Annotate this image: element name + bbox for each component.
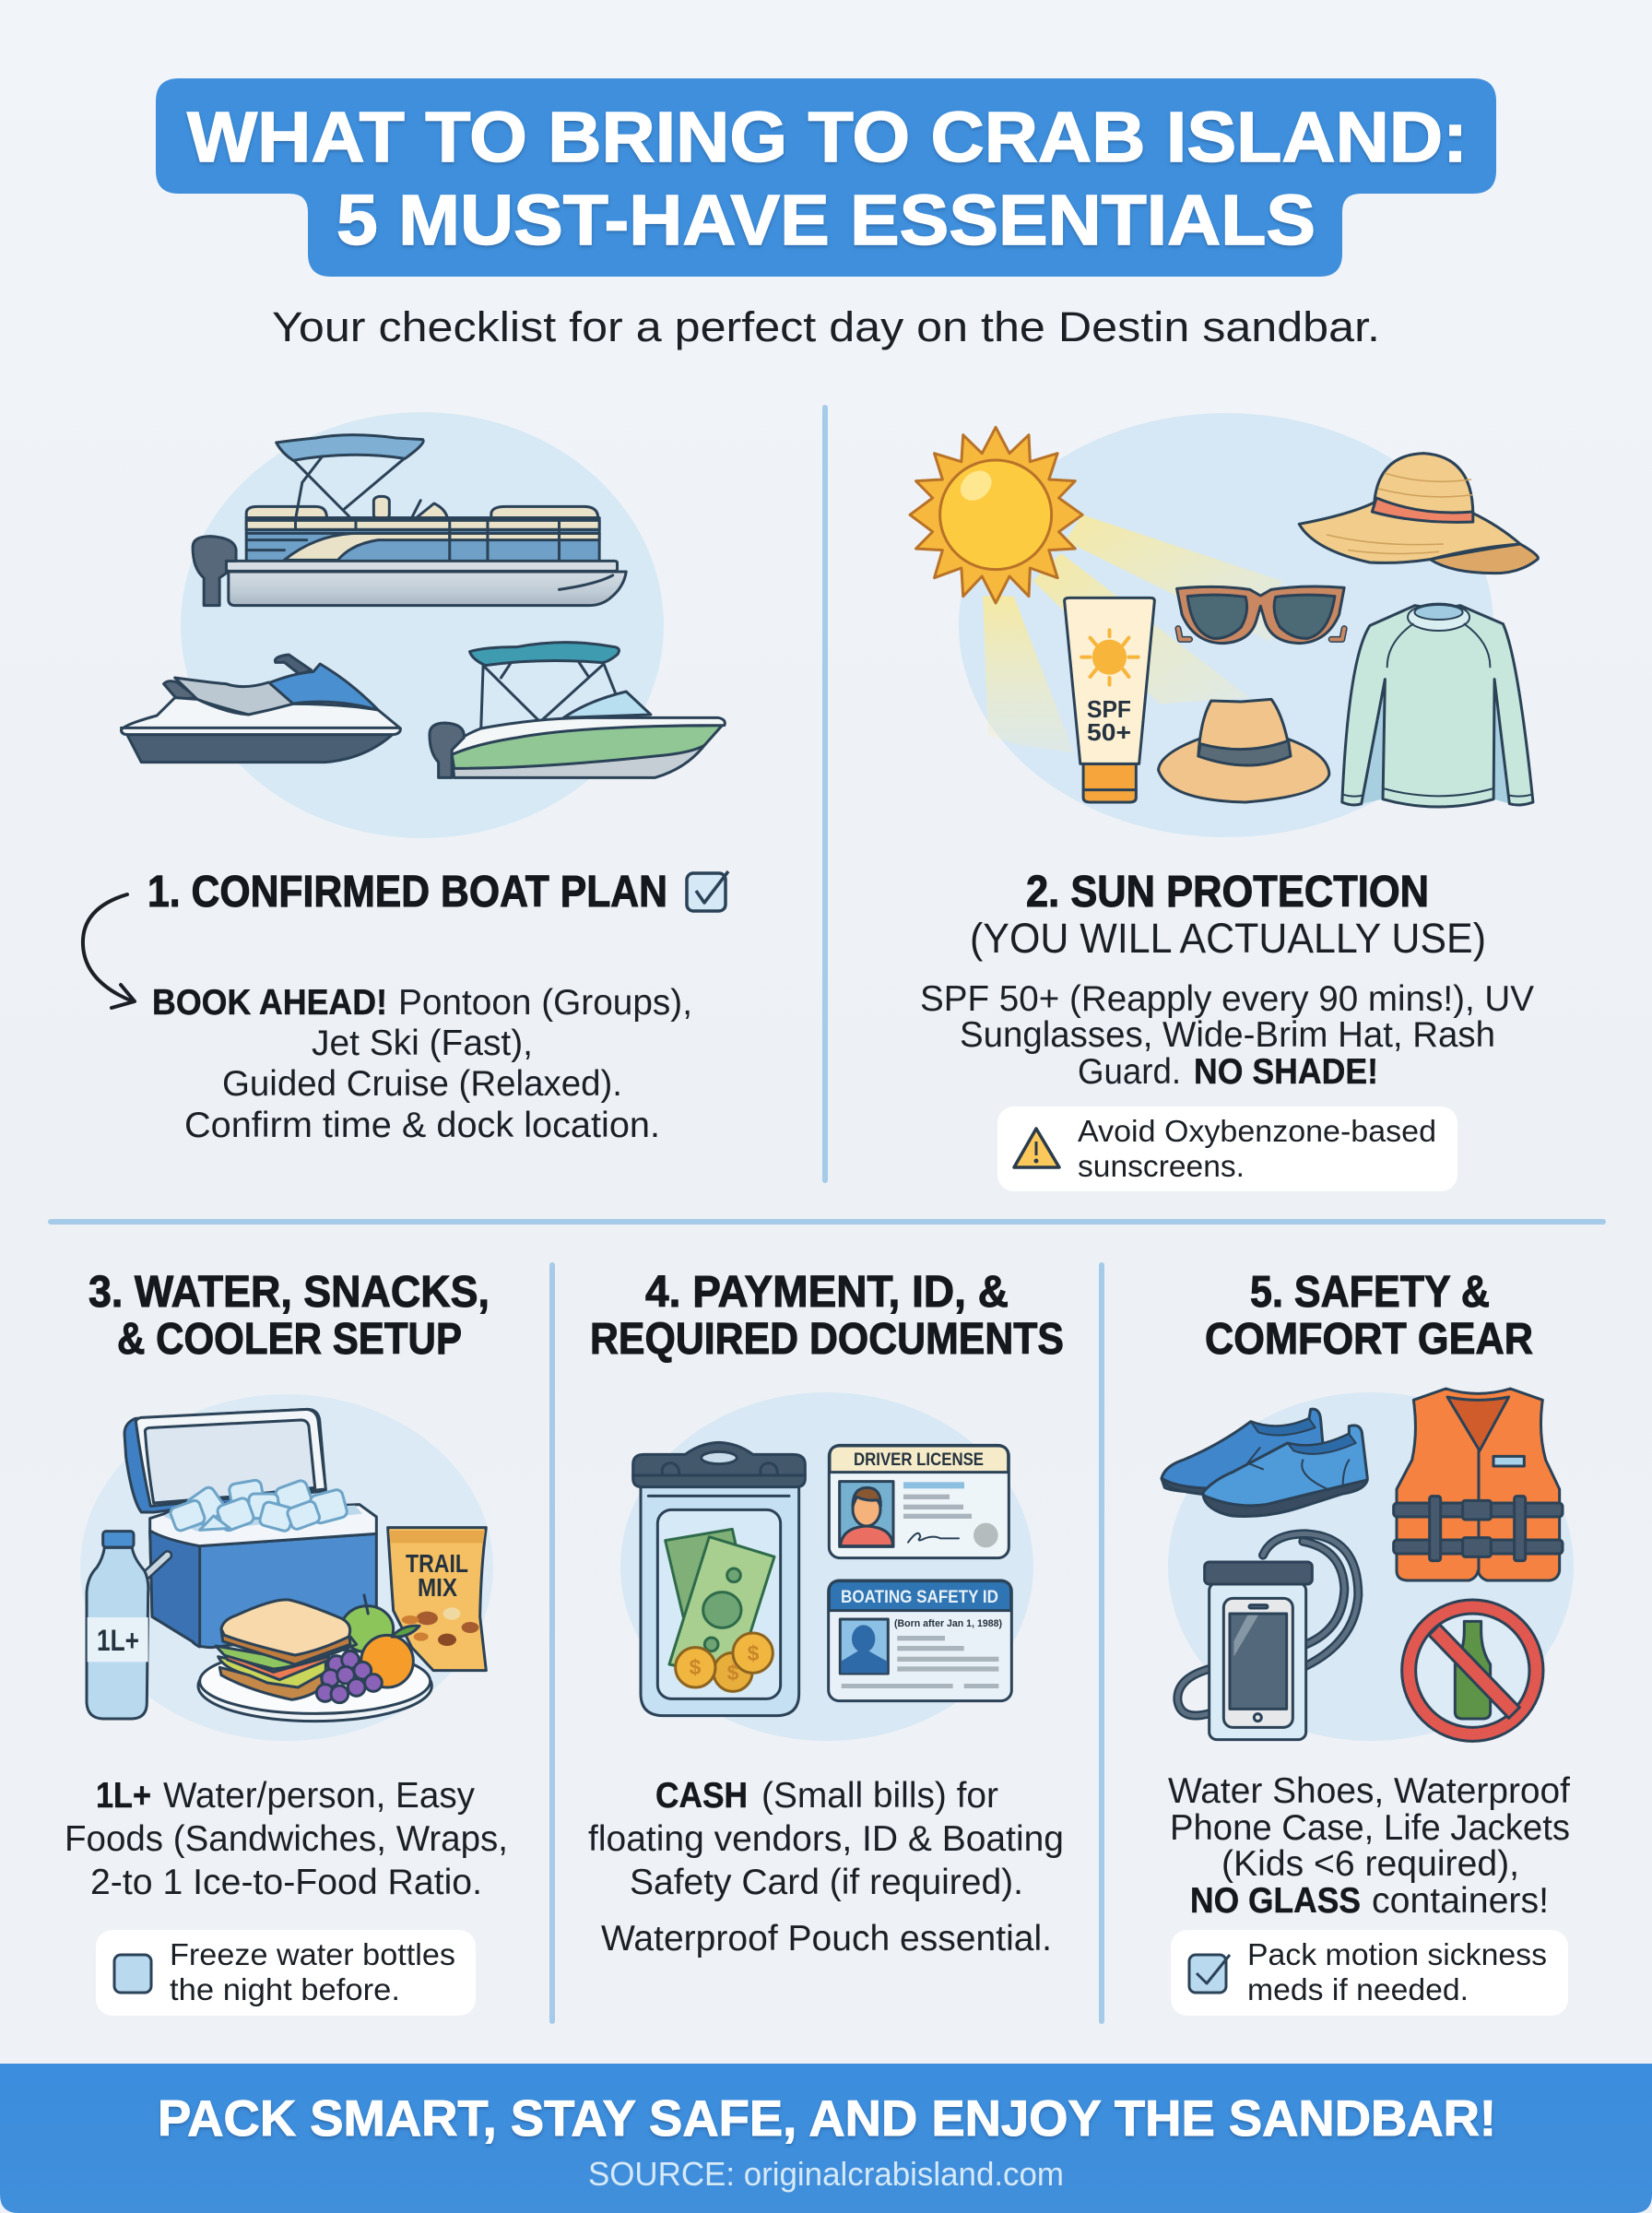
text: safety gear details: Water Shoes, Waterproof bbox=[1168, 1771, 1570, 1811]
heading: payment and documents bbox=[590, 1268, 1064, 1364]
text: payment details: floating vendors, ID & Boating bbox=[588, 1819, 1064, 1859]
pontoon boat bbox=[193, 435, 626, 606]
text: sun protection details: SPF 50+ (Reapply every 90 mins!), UV bbox=[920, 979, 1534, 1019]
title banner: WHAT TO BRING TO CRAB ISLAND: bbox=[187, 98, 1468, 177]
phone case bbox=[1177, 1533, 1358, 1740]
text: sun protection details bbox=[920, 979, 1534, 1092]
panel: sun protection bbox=[910, 413, 1538, 1191]
title banner bbox=[156, 78, 1496, 277]
driver license card bbox=[829, 1445, 1009, 1558]
heading: safety and comfort bbox=[1205, 1268, 1533, 1364]
icon: ticked checkbox bbox=[1189, 1955, 1230, 1993]
heading: payment and documents: 4. PAYMENT, ID, & bbox=[645, 1268, 1009, 1317]
text: safety gear details bbox=[1168, 1771, 1570, 1921]
sun bbox=[910, 427, 1082, 603]
heading: safety and comfort: COMFORT GEAR bbox=[1205, 1315, 1533, 1364]
callout: oxybenzone warning bbox=[997, 1106, 1457, 1191]
icon: boats illustration bbox=[122, 412, 725, 838]
sun hat bbox=[1159, 699, 1329, 802]
rash guard bbox=[1342, 604, 1533, 807]
text: boat plan details: BOOK AHEAD! bbox=[152, 983, 387, 1023]
footer banner bbox=[0, 2064, 1652, 2213]
title banner: 5 MUST-HAVE ESSENTIALS bbox=[336, 181, 1316, 260]
callout: freeze water tip: Freeze water bottles bbox=[170, 1938, 455, 1972]
text: water and food details: Water/person, Easy bbox=[163, 1776, 476, 1816]
icon: safety gear illustration bbox=[1162, 1389, 1574, 1741]
text: boat plan details: Confirm time & dock location. bbox=[184, 1106, 660, 1145]
callout: motion sickness tip: meds if needed. bbox=[1247, 1973, 1469, 2007]
sun rays bbox=[983, 515, 1282, 753]
bag label bbox=[406, 1549, 468, 1602]
waterproof pouch bbox=[633, 1442, 805, 1716]
icon: documents illustration bbox=[620, 1392, 1033, 1741]
bowrider boat bbox=[430, 643, 725, 777]
boating safety card bbox=[829, 1580, 1011, 1701]
bag label: TRAIL bbox=[406, 1549, 468, 1578]
coin symbols: $ bbox=[690, 1655, 702, 1679]
panel: water, snacks and cooler bbox=[65, 1268, 508, 2016]
bottle label: 1L+ bbox=[97, 1624, 139, 1657]
text: safety gear details: containers! bbox=[1372, 1881, 1549, 1921]
heading: sun protection: (YOU WILL ACTUALLY USE) bbox=[970, 915, 1486, 962]
callout: oxybenzone warning: sunscreens. bbox=[1078, 1150, 1245, 1184]
wide brim hat bbox=[1299, 454, 1538, 574]
ice cubes bbox=[169, 1479, 348, 1533]
panel: safety and comfort gear bbox=[1162, 1268, 1574, 2016]
text: sun protection details: Guard. bbox=[1078, 1052, 1181, 1092]
text: water and food details: 2-to 1 Ice-to-Food Ratio. bbox=[90, 1863, 482, 1902]
panel: payment, ID and documents bbox=[588, 1268, 1064, 1959]
card labels: DRIVER LICENSE bbox=[854, 1450, 984, 1470]
cooler bbox=[124, 1409, 376, 1648]
icon: heading checkbox bbox=[687, 871, 728, 911]
arrow: heading to body bbox=[83, 894, 135, 1008]
panel: confirmed boat plan bbox=[83, 412, 728, 1145]
text: payment details: (Small bills) for bbox=[761, 1776, 998, 1816]
heading: water snacks cooler bbox=[88, 1268, 490, 1364]
plate of food bbox=[198, 1595, 431, 1722]
callout: motion sickness tip: Pack motion sickness bbox=[1247, 1938, 1547, 1972]
coin symbols: $ bbox=[748, 1641, 760, 1665]
sunglasses bbox=[1177, 586, 1344, 644]
subtitle: Your checklist for a perfect day on the Destin sandbar. bbox=[272, 303, 1380, 350]
no glass sign bbox=[1402, 1600, 1543, 1741]
icon: sun protection illustration bbox=[910, 413, 1538, 837]
heading: sun protection: 2. SUN PROTECTION bbox=[1026, 868, 1429, 917]
text: safety gear details: (Kids <6 required), bbox=[1221, 1844, 1519, 1884]
footer banner: SOURCE: originalcrabisland.com bbox=[588, 2155, 1064, 2193]
text: sun protection details: NO SHADE! bbox=[1194, 1052, 1378, 1092]
callout: motion sickness tip bbox=[1171, 1930, 1568, 2016]
heading: confirmed boat plan: 1. CONFIRMED BOAT PLAN bbox=[148, 868, 667, 917]
footer banner: PACK SMART, STAY SAFE, AND ENJOY THE SANDBAR! bbox=[158, 2089, 1496, 2147]
heading: water snacks cooler: & COOLER SETUP bbox=[117, 1315, 462, 1364]
text: payment details: CASH bbox=[655, 1776, 748, 1816]
text: boat plan details bbox=[152, 983, 692, 1145]
text: water and food details: 1L+ bbox=[96, 1776, 151, 1816]
text: sun protection details: Sunglasses, Wide-Brim Hat, Rash bbox=[960, 1015, 1495, 1055]
icon: empty checkbox bbox=[114, 1955, 151, 1993]
text: water and food details bbox=[65, 1776, 508, 1902]
icon: cooler and food illustration bbox=[80, 1394, 493, 1741]
heading: payment and documents: REQUIRED DOCUMENTS bbox=[590, 1315, 1064, 1364]
card labels bbox=[841, 1450, 1002, 1629]
callout: freeze water tip bbox=[96, 1930, 476, 2016]
trail mix bag bbox=[388, 1528, 486, 1671]
text: boat plan details: Pontoon (Groups), bbox=[398, 983, 692, 1023]
heading: safety and comfort: 5. SAFETY & bbox=[1250, 1268, 1490, 1317]
text: water and food details: Foods (Sandwiches, Wraps, bbox=[65, 1819, 508, 1859]
text: boat plan details: Jet Ski (Fast), bbox=[312, 1024, 533, 1063]
callout: freeze water tip: the night before. bbox=[170, 1973, 400, 2007]
heading: sun protection bbox=[970, 868, 1486, 962]
text: payment details: Safety Card (if required). bbox=[630, 1863, 1023, 1902]
text: safety gear details: Phone Case, Life Jackets bbox=[1170, 1808, 1570, 1848]
jet ski bbox=[122, 655, 400, 763]
icon: sun protection illustration: 50+ bbox=[1087, 718, 1131, 746]
tube label: SPF bbox=[1087, 695, 1131, 723]
sunscreen tube bbox=[1065, 598, 1154, 802]
heading: water snacks cooler: 3. WATER, SNACKS, bbox=[88, 1268, 490, 1317]
bag label: MIX bbox=[418, 1573, 457, 1602]
panel dividers bbox=[48, 405, 1606, 2024]
coin symbols: $ bbox=[727, 1661, 739, 1685]
text: safety gear details: NO GLASS bbox=[1190, 1881, 1361, 1921]
text: boat plan details: Guided Cruise (Relaxed). bbox=[222, 1064, 622, 1104]
icon: warning triangle bbox=[1014, 1129, 1059, 1167]
water shoes bbox=[1162, 1409, 1367, 1516]
text: payment details: Waterproof Pouch essential. bbox=[601, 1919, 1052, 1959]
card labels: BOATING SAFETY ID bbox=[841, 1587, 998, 1607]
water bottle bbox=[87, 1532, 148, 1719]
life jacket bbox=[1394, 1389, 1563, 1580]
callout: oxybenzone warning: Avoid Oxybenzone-based bbox=[1078, 1115, 1436, 1149]
coin symbols bbox=[690, 1641, 760, 1685]
text: payment details bbox=[588, 1776, 1064, 1959]
card labels: (Born after Jan 1, 1988) bbox=[894, 1618, 1002, 1629]
